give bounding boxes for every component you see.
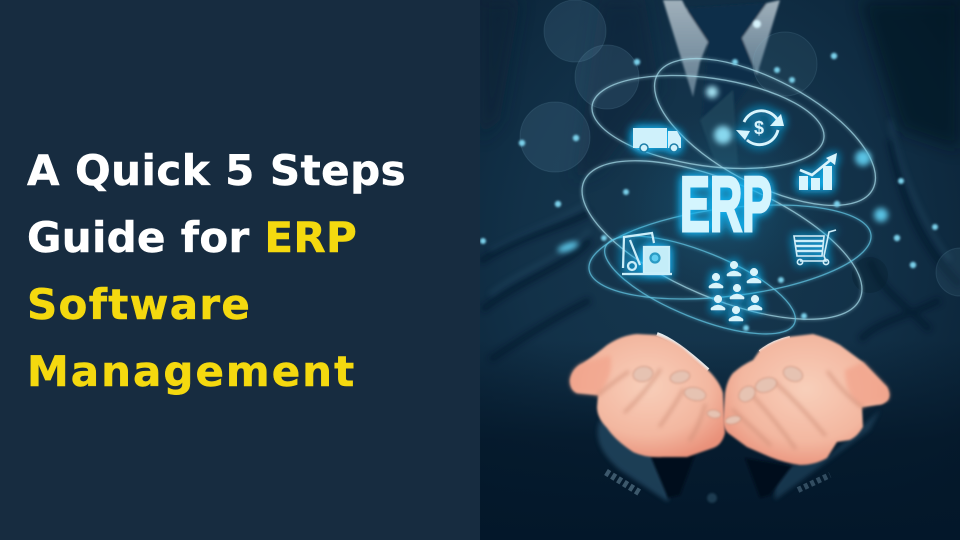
- icon: robot arm with machine: [622, 233, 672, 274]
- title: Guide for ERP: [27, 213, 357, 262]
- title: Software: [27, 280, 251, 329]
- ERP lettering: ERP: [680, 160, 772, 248]
- fingernails right hand: [724, 364, 805, 426]
- icon: growth chart: [799, 153, 837, 190]
- bokeh circles: [520, 0, 960, 296]
- hologram glow: [620, 110, 830, 300]
- title: Management: [27, 347, 356, 396]
- icon: dollar cycle: $: [754, 118, 764, 138]
- icon: dollar cycle: [736, 111, 784, 145]
- icon: people network: [709, 261, 762, 321]
- icon: delivery truck: [633, 128, 681, 152]
- orbit rings: [561, 29, 897, 354]
- left hand: [570, 334, 725, 457]
- fingernails left hand: [632, 365, 721, 419]
- icon: shopping cart: [794, 230, 836, 265]
- shirt collar and tie: [663, 0, 780, 165]
- title: A Quick 5 Steps: [27, 146, 406, 195]
- panel: photo of businessman holding ERP hologram: [480, 0, 960, 540]
- suit cuffs and lower jacket: [598, 410, 880, 503]
- suit background: [480, 0, 960, 540]
- title: [26, 146, 406, 396]
- light particles: [480, 20, 938, 331]
- panel: left navy background: [0, 0, 480, 540]
- right hand: [723, 334, 889, 465]
